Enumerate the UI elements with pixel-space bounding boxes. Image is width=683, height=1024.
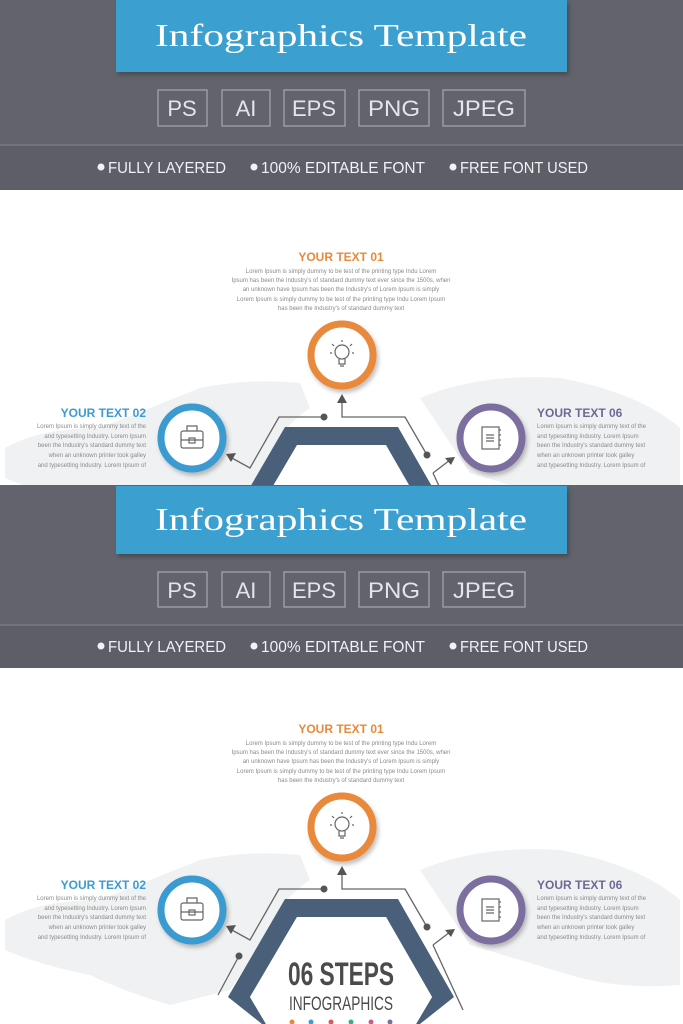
format badges 2: PNG	[368, 578, 420, 603]
content panel 1 (cropped): an unknown have Ipsum has been the Industry's of Lorem Ipsum is simply	[243, 287, 439, 293]
header panel 2	[0, 485, 683, 668]
content panel 1 (cropped)	[5, 252, 680, 485]
text block 06: and typesetting Industry. Lorem Ipsum	[537, 906, 639, 912]
content panel 1 (cropped): and typesetting Industry. Lorem Ipsum of	[38, 463, 146, 469]
format badges: JPEG	[453, 96, 515, 121]
content panel 1 (cropped): Lorem Ipsum is simply dummy text of the	[37, 424, 147, 430]
feature bullets 2: 100% EDITABLE FONT	[261, 639, 425, 656]
content panel 1 (cropped): Lorem Ipsum is simply dummy to be test of the printing type Indu Lorem Ipsum	[237, 297, 445, 303]
text block 06	[536, 878, 647, 941]
format badges 2: PS	[167, 578, 197, 603]
format badges: PNG	[368, 96, 420, 121]
content panel 1 (cropped): YOUR TEXT 01	[298, 250, 384, 264]
central hexagon: INFOGRAPHICS	[289, 994, 393, 1015]
content panel 1 (cropped): Lorem Ipsum is simply dummy text of the	[537, 424, 647, 430]
text block 02: Lorem Ipsum is simply dummy text of the	[37, 896, 147, 902]
central hexagon	[228, 899, 454, 1024]
text block 06: been the Industry's standard dummy text	[537, 915, 646, 921]
content panel 1 (cropped): and typesetting Industry. Lorem Ipsum	[44, 434, 146, 440]
connector arrows	[218, 866, 463, 1010]
content panel 1 (cropped): been the Industry's standard dummy text	[38, 443, 146, 449]
text block 02: been the Industry's standard dummy text	[38, 915, 146, 921]
title banner 2	[116, 486, 567, 554]
text block 02: when an unknown printer took galley	[48, 925, 146, 931]
format badges	[158, 90, 525, 126]
central hexagon: 06 STEPS	[288, 956, 394, 992]
feature bullets 2	[98, 639, 588, 656]
content panel 1 (cropped): when an unknown printer took galley	[48, 453, 146, 459]
title banner: Infographics Template	[155, 17, 527, 53]
feature bullets 2: FREE FONT USED	[460, 639, 588, 656]
content panel 1 (cropped): Ipsum has been the Industry's of standard dummy text ever since the 1500s, when	[232, 278, 450, 284]
format badges 2: JPEG	[453, 578, 515, 603]
icon circle: notebook	[460, 879, 522, 941]
content panel 1 (cropped): when an unknown printer took galley	[536, 453, 634, 459]
text block 01: YOUR TEXT 01	[298, 722, 384, 736]
format badges: AI	[236, 96, 256, 121]
title banner 2: Infographics Template	[155, 501, 527, 537]
content panel 1 (cropped): has been the Industry's of standard dummy text	[278, 306, 404, 312]
text block 06: Lorem Ipsum is simply dummy text of the	[537, 896, 647, 902]
world map background	[5, 849, 680, 1005]
feature bullets	[98, 160, 588, 177]
text block 01: an unknown have Ipsum has been the Industry's of Lorem Ipsum is simply	[243, 759, 439, 765]
text block 06: YOUR TEXT 06	[537, 878, 623, 892]
text block 02: and typesetting Industry. Lorem Ipsum of	[38, 935, 146, 941]
content panel 1 (cropped): and typesetting Industry. Lorem Ipsum of	[537, 463, 646, 469]
format badges 2: AI	[236, 578, 256, 603]
text block 01: Lorem Ipsum is simply dummy to be test of the printing type Indu Lorem Ipsum	[237, 769, 445, 775]
text block 06: when an unknown printer took galley	[536, 925, 634, 931]
text block 01: Ipsum has been the Industry's of standard dummy text ever since the 1500s, when	[232, 750, 450, 756]
text block 02: and typesetting Industry. Lorem Ipsum	[44, 906, 146, 912]
feature bullets: 100% EDITABLE FONT	[261, 160, 425, 177]
content panel 1 (cropped): Lorem Ipsum is simply dummy to be test of the printing type Indu Lorem	[246, 269, 436, 275]
text block 01: Lorem Ipsum is simply dummy to be test of the printing type Indu Lorem	[246, 741, 436, 747]
format badges 2: EPS	[292, 578, 336, 603]
content panel 1 (cropped): been the Industry's standard dummy text	[537, 443, 646, 449]
format badges: EPS	[292, 96, 336, 121]
format badges: PS	[167, 96, 197, 121]
feature bullets 2: FULLY LAYERED	[108, 639, 226, 656]
content panel 1 (cropped): and typesetting Industry. Lorem Ipsum	[537, 434, 639, 440]
content panel 1 (cropped): YOUR TEXT 06	[537, 406, 623, 420]
format badges 2	[158, 572, 525, 607]
text block 01	[232, 722, 450, 784]
content panel 2	[5, 722, 680, 1024]
feature bullets: FREE FONT USED	[460, 160, 588, 177]
content panel 1 (cropped): YOUR TEXT 02	[61, 406, 146, 420]
feature bullets: FULLY LAYERED	[108, 160, 226, 177]
title banner	[116, 0, 567, 72]
text block 06: and typesetting Industry. Lorem Ipsum of	[537, 935, 646, 941]
text block 01: has been the Industry's of standard dummy text	[278, 778, 404, 784]
header panel 1	[0, 0, 683, 190]
icon circle: briefcase	[161, 879, 223, 941]
text block 02	[37, 878, 147, 941]
icon circle: lightbulb	[311, 796, 373, 858]
text block 02: YOUR TEXT 02	[61, 878, 146, 892]
